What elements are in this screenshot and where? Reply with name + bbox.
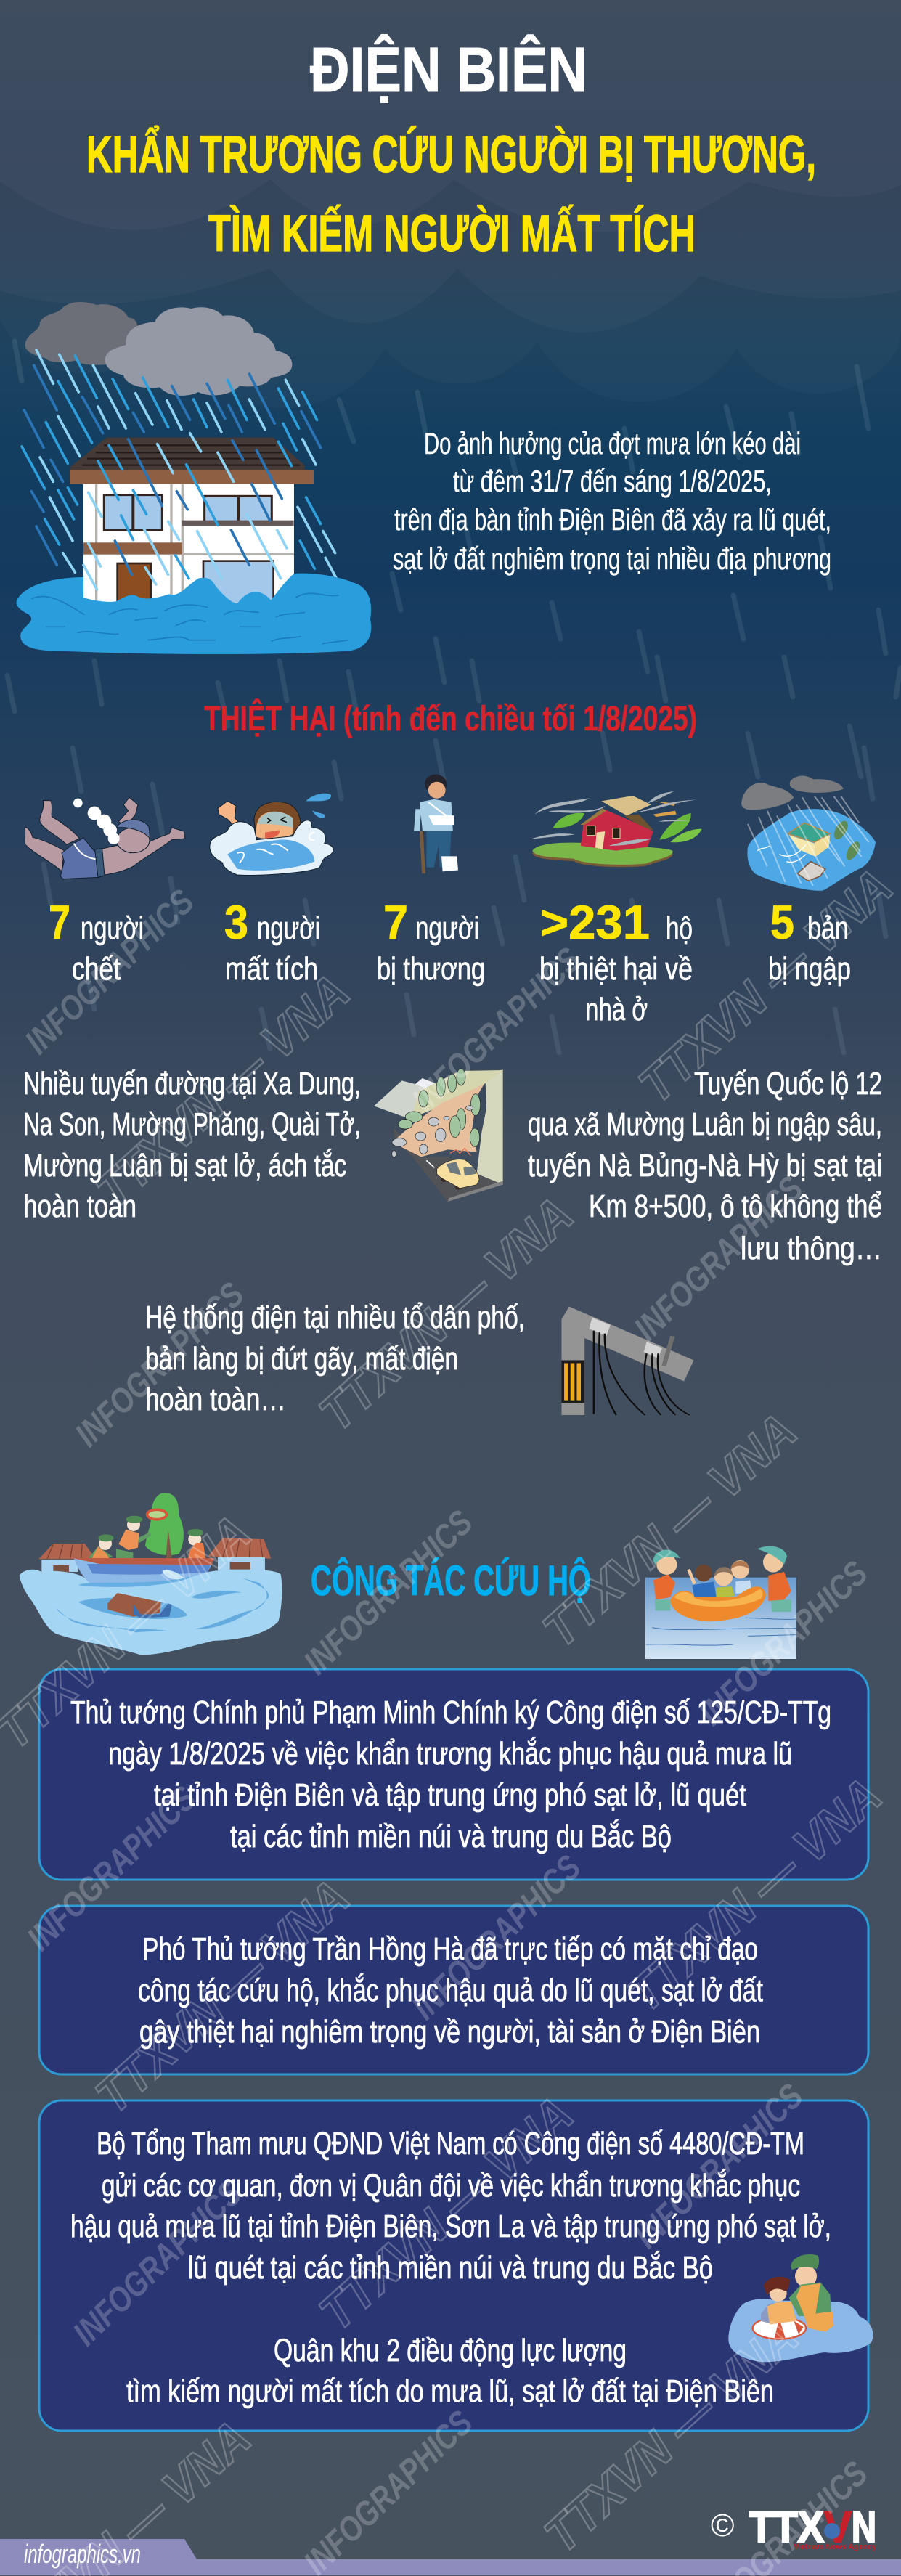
card: prime minister: tại tỉnh Điện Biên và tập trung ứng phó sạt lở, lũ quét bbox=[154, 1777, 746, 1813]
watermarks: TTXVN — VNA bbox=[533, 1403, 807, 1658]
title line 1: ĐIỆN BIÊN bbox=[310, 34, 587, 105]
label: người chết bbox=[72, 910, 144, 987]
intro paragraph: từ đêm 31/7 đến sáng 1/8/2025, bbox=[453, 464, 772, 498]
watermarks: INFOGRAPHICS bbox=[20, 1780, 204, 1958]
label: người mất tích: người bbox=[257, 910, 320, 946]
watermarks: TTXVN — VNA bbox=[618, 1767, 892, 2022]
watermarks: INFOGRAPHICS bbox=[405, 1849, 589, 2027]
label: người bị thương: người bbox=[415, 910, 479, 946]
title bbox=[86, 34, 816, 263]
card: general staff: lũ quét tại các tỉnh miền núi và trung du Bắc Bộ bbox=[188, 2250, 713, 2286]
number 5: 5 bbox=[770, 895, 794, 949]
label: bản bị ngập: bản bbox=[807, 910, 849, 946]
watermarks: INFOGRAPHICS bbox=[297, 1504, 481, 1682]
icon: house in storm bbox=[530, 791, 702, 867]
title line 3: TÌM KIẾM NGƯỜI MẤT TÍCH bbox=[208, 205, 696, 263]
number 7: 7 bbox=[383, 895, 408, 949]
label: người mất tích bbox=[225, 910, 320, 987]
label: hộ bị thiệt hại về nhà ở: bị thiệt hại về bbox=[539, 951, 693, 987]
number 7: 7 bbox=[49, 895, 70, 949]
copyright logo: N bbox=[852, 2503, 876, 2551]
card: deputy prime minister bbox=[39, 1906, 868, 2074]
stat: 3 missing bbox=[210, 794, 333, 987]
number over 231: >231 bbox=[540, 895, 650, 949]
text: roads in landslides: Nhiều tuyến đường tại Xa Dung, bbox=[23, 1066, 361, 1101]
copyright logo: V bbox=[824, 2503, 852, 2551]
watermarks: INFOGRAPHICS bbox=[18, 883, 202, 1061]
watermarks: INFOGRAPHICS bbox=[68, 1276, 252, 1454]
watermarks: TTXVN — VNA bbox=[86, 963, 360, 1218]
text: roads in landslides: Na Son, Mường Phăng, Quài Tở, bbox=[23, 1106, 361, 1142]
label: hộ bị thiệt hại về nhà ở bbox=[539, 910, 693, 1027]
text: power system: hoàn toàn… bbox=[145, 1382, 286, 1417]
label: bản bị ngập bbox=[768, 910, 851, 987]
label: người bị thương: bị thương bbox=[377, 951, 485, 987]
card: prime minister: tại các tỉnh miền núi và trung du Bắc Bộ bbox=[230, 1819, 672, 1854]
card: general staff: Quân khu 2 điều động lực lượng bbox=[274, 2333, 627, 2368]
watermarks: INFOGRAPHICS bbox=[627, 1170, 811, 1348]
copyright logo bbox=[711, 2503, 877, 2551]
label: người chết: chết bbox=[72, 951, 121, 987]
icon: soldier with child in float bbox=[728, 2254, 873, 2362]
text: power system bbox=[145, 1300, 525, 1417]
number 3: 3 bbox=[224, 895, 248, 949]
source: infographics.vn bbox=[24, 2539, 141, 2569]
icon: broken power pole bbox=[561, 1306, 694, 1415]
watermarks: INFOGRAPHICS bbox=[627, 2077, 811, 2256]
text: national road 12 bbox=[528, 1066, 882, 1266]
intro paragraph bbox=[393, 426, 831, 576]
copyright logo: TTX bbox=[749, 2503, 824, 2551]
text: roads in landslides: Mường Luân bị sạt lở, ách tắc bbox=[23, 1148, 346, 1183]
watermarks: INFOGRAPHICS bbox=[66, 2174, 250, 2353]
text: roads in landslides bbox=[23, 1066, 361, 1224]
icon: falling person bbox=[25, 797, 185, 879]
label: bản bị ngập: bị ngập bbox=[768, 951, 851, 987]
copyright logo: © bbox=[711, 2508, 734, 2543]
watermarks: TTXVN — VNA bbox=[534, 2308, 809, 2563]
icon: drowning person bbox=[210, 794, 333, 875]
label: người bị thương bbox=[377, 910, 485, 987]
stat: 5 villages bbox=[741, 776, 876, 987]
text: power system: Hệ thống điện tại nhiều tổ dân phố, bbox=[145, 1300, 525, 1335]
icon: landslide on road bbox=[374, 1069, 503, 1202]
card: general staff bbox=[39, 2100, 868, 2431]
icon: rescuers with raft bbox=[645, 1546, 796, 1659]
heading: rescue work: CÔNG TÁC CỨU HỘ bbox=[311, 1557, 591, 1605]
icon: flooded house in rain bbox=[16, 302, 371, 654]
icon: flooded village bbox=[741, 776, 876, 891]
label: người chết: người bbox=[81, 910, 144, 946]
card: prime minister bbox=[39, 1669, 868, 1880]
watermarks: TTXVN — VNA bbox=[309, 2086, 584, 2341]
label: hộ bị thiệt hại về nhà ở: hộ bbox=[666, 910, 693, 946]
watermarks bbox=[0, 858, 901, 2576]
watermarks: INFOGRAPHICS bbox=[405, 941, 589, 1120]
icon: rescue boat in flood bbox=[20, 1493, 282, 1655]
stat: over 231 households bbox=[530, 791, 702, 1027]
text: roads in landslides: hoàn toàn bbox=[23, 1189, 136, 1224]
label: hộ bị thiệt hại về nhà ở: nhà ở bbox=[585, 992, 648, 1027]
watermarks: TTXVN — VNA bbox=[86, 1869, 360, 2124]
footer band bbox=[0, 2539, 901, 2575]
stat: 7 dead bbox=[25, 797, 185, 987]
heading: damage: THIỆT HẠI (tính đến chiều tối 1/8/2025) bbox=[204, 698, 697, 738]
copyright logo: Vietnam News Agency bbox=[794, 2543, 877, 2551]
text: power system: bản làng bị đứt gãy, mất điện bbox=[145, 1341, 458, 1377]
icon: injured person on crutch bbox=[417, 774, 458, 873]
label: người mất tích: mất tích bbox=[225, 951, 318, 987]
stat: 7 injured bbox=[377, 774, 485, 987]
watermarks: TTXVN — VNA bbox=[309, 1186, 584, 1441]
